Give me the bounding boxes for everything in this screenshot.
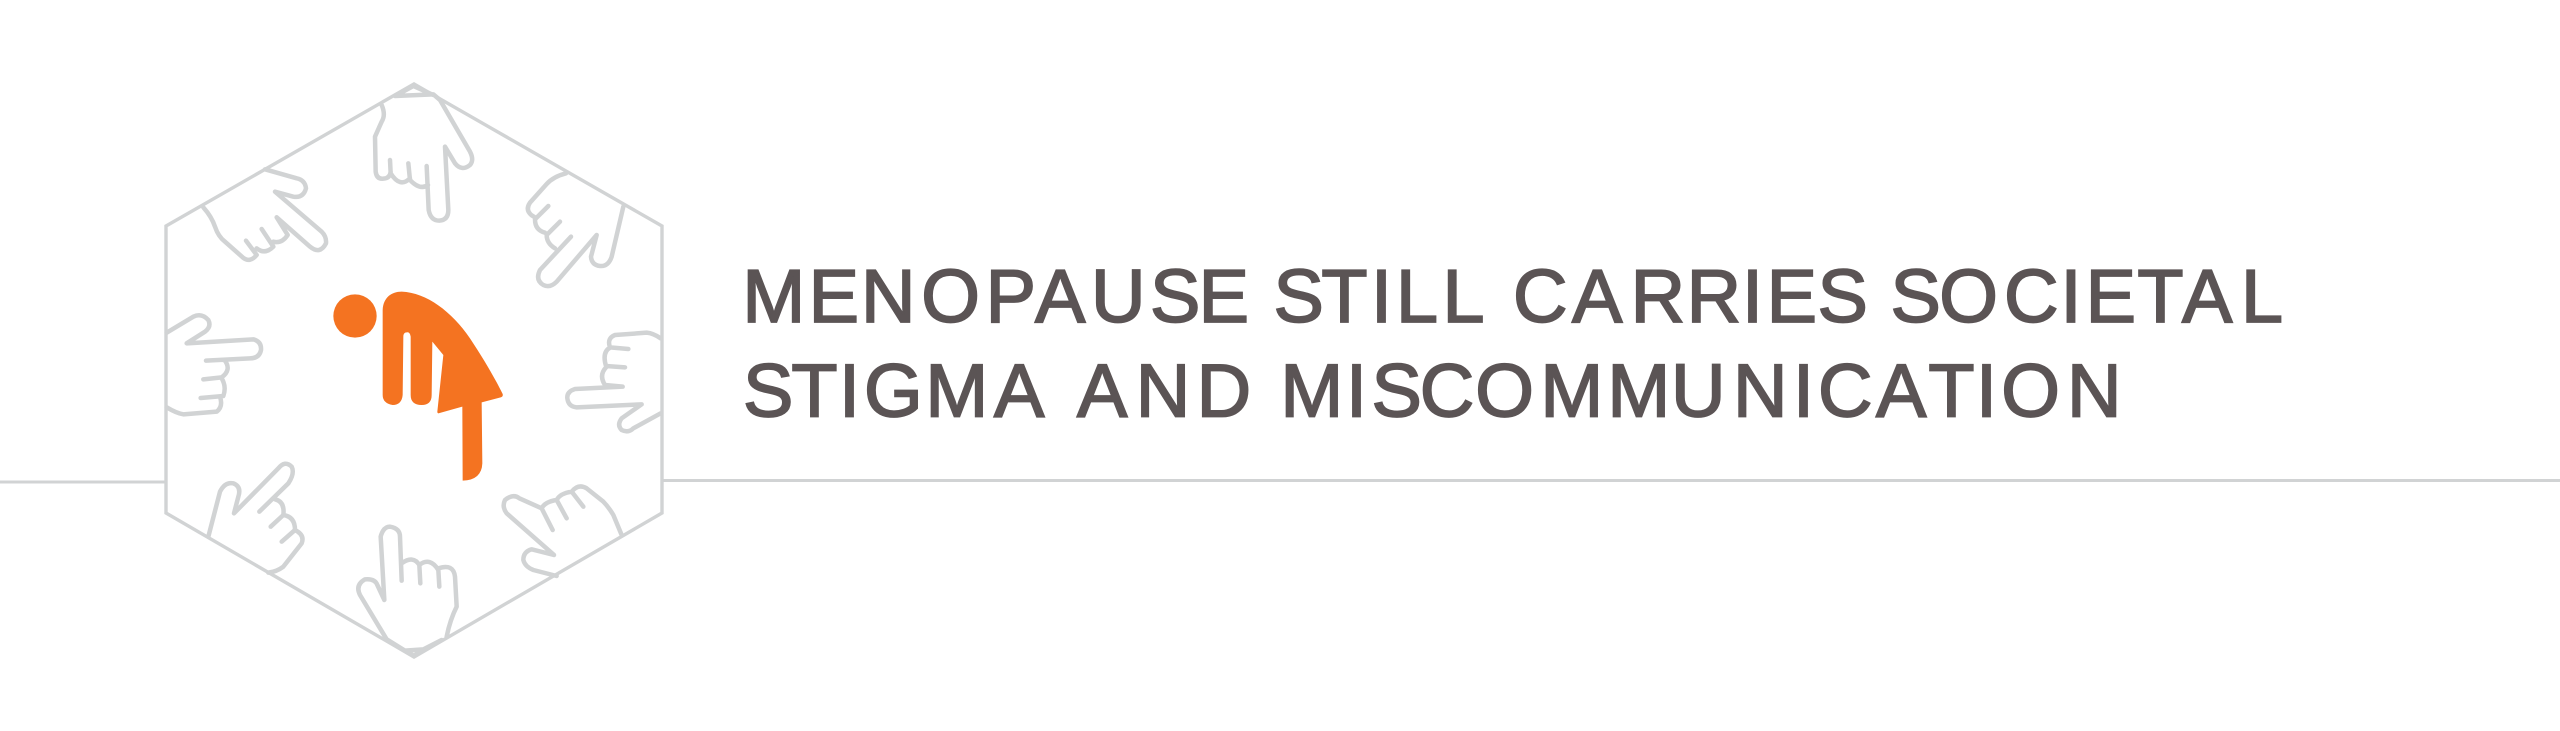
upper left hand [203,169,326,260]
figure head [333,294,377,338]
title line 1: STILL [1274,254,1484,338]
title line 2 [743,349,2122,433]
title line 1 [742,254,2283,338]
bottom hand [358,527,457,656]
title line 2: MISCOMMUNICATION [1280,349,2122,433]
left hand [167,315,261,414]
right rule [663,479,2560,482]
lower right hand [504,486,622,576]
icon: orange bowing figure [333,292,503,481]
title line 2: STIGMA [743,349,1045,433]
title line 1: SOCIETAL [1890,254,2283,338]
left rule [0,480,166,484]
top hand [375,86,472,221]
hexagon frame [166,84,662,657]
title line 1: CARRIES [1513,254,1868,338]
title line 1: MENOPAUSE [742,254,1249,338]
right hand [567,333,661,431]
upper right hand [528,173,623,286]
lower left hand [208,464,302,573]
figure body [383,292,503,481]
title line 2: AND [1077,349,1251,433]
title [742,254,2283,433]
